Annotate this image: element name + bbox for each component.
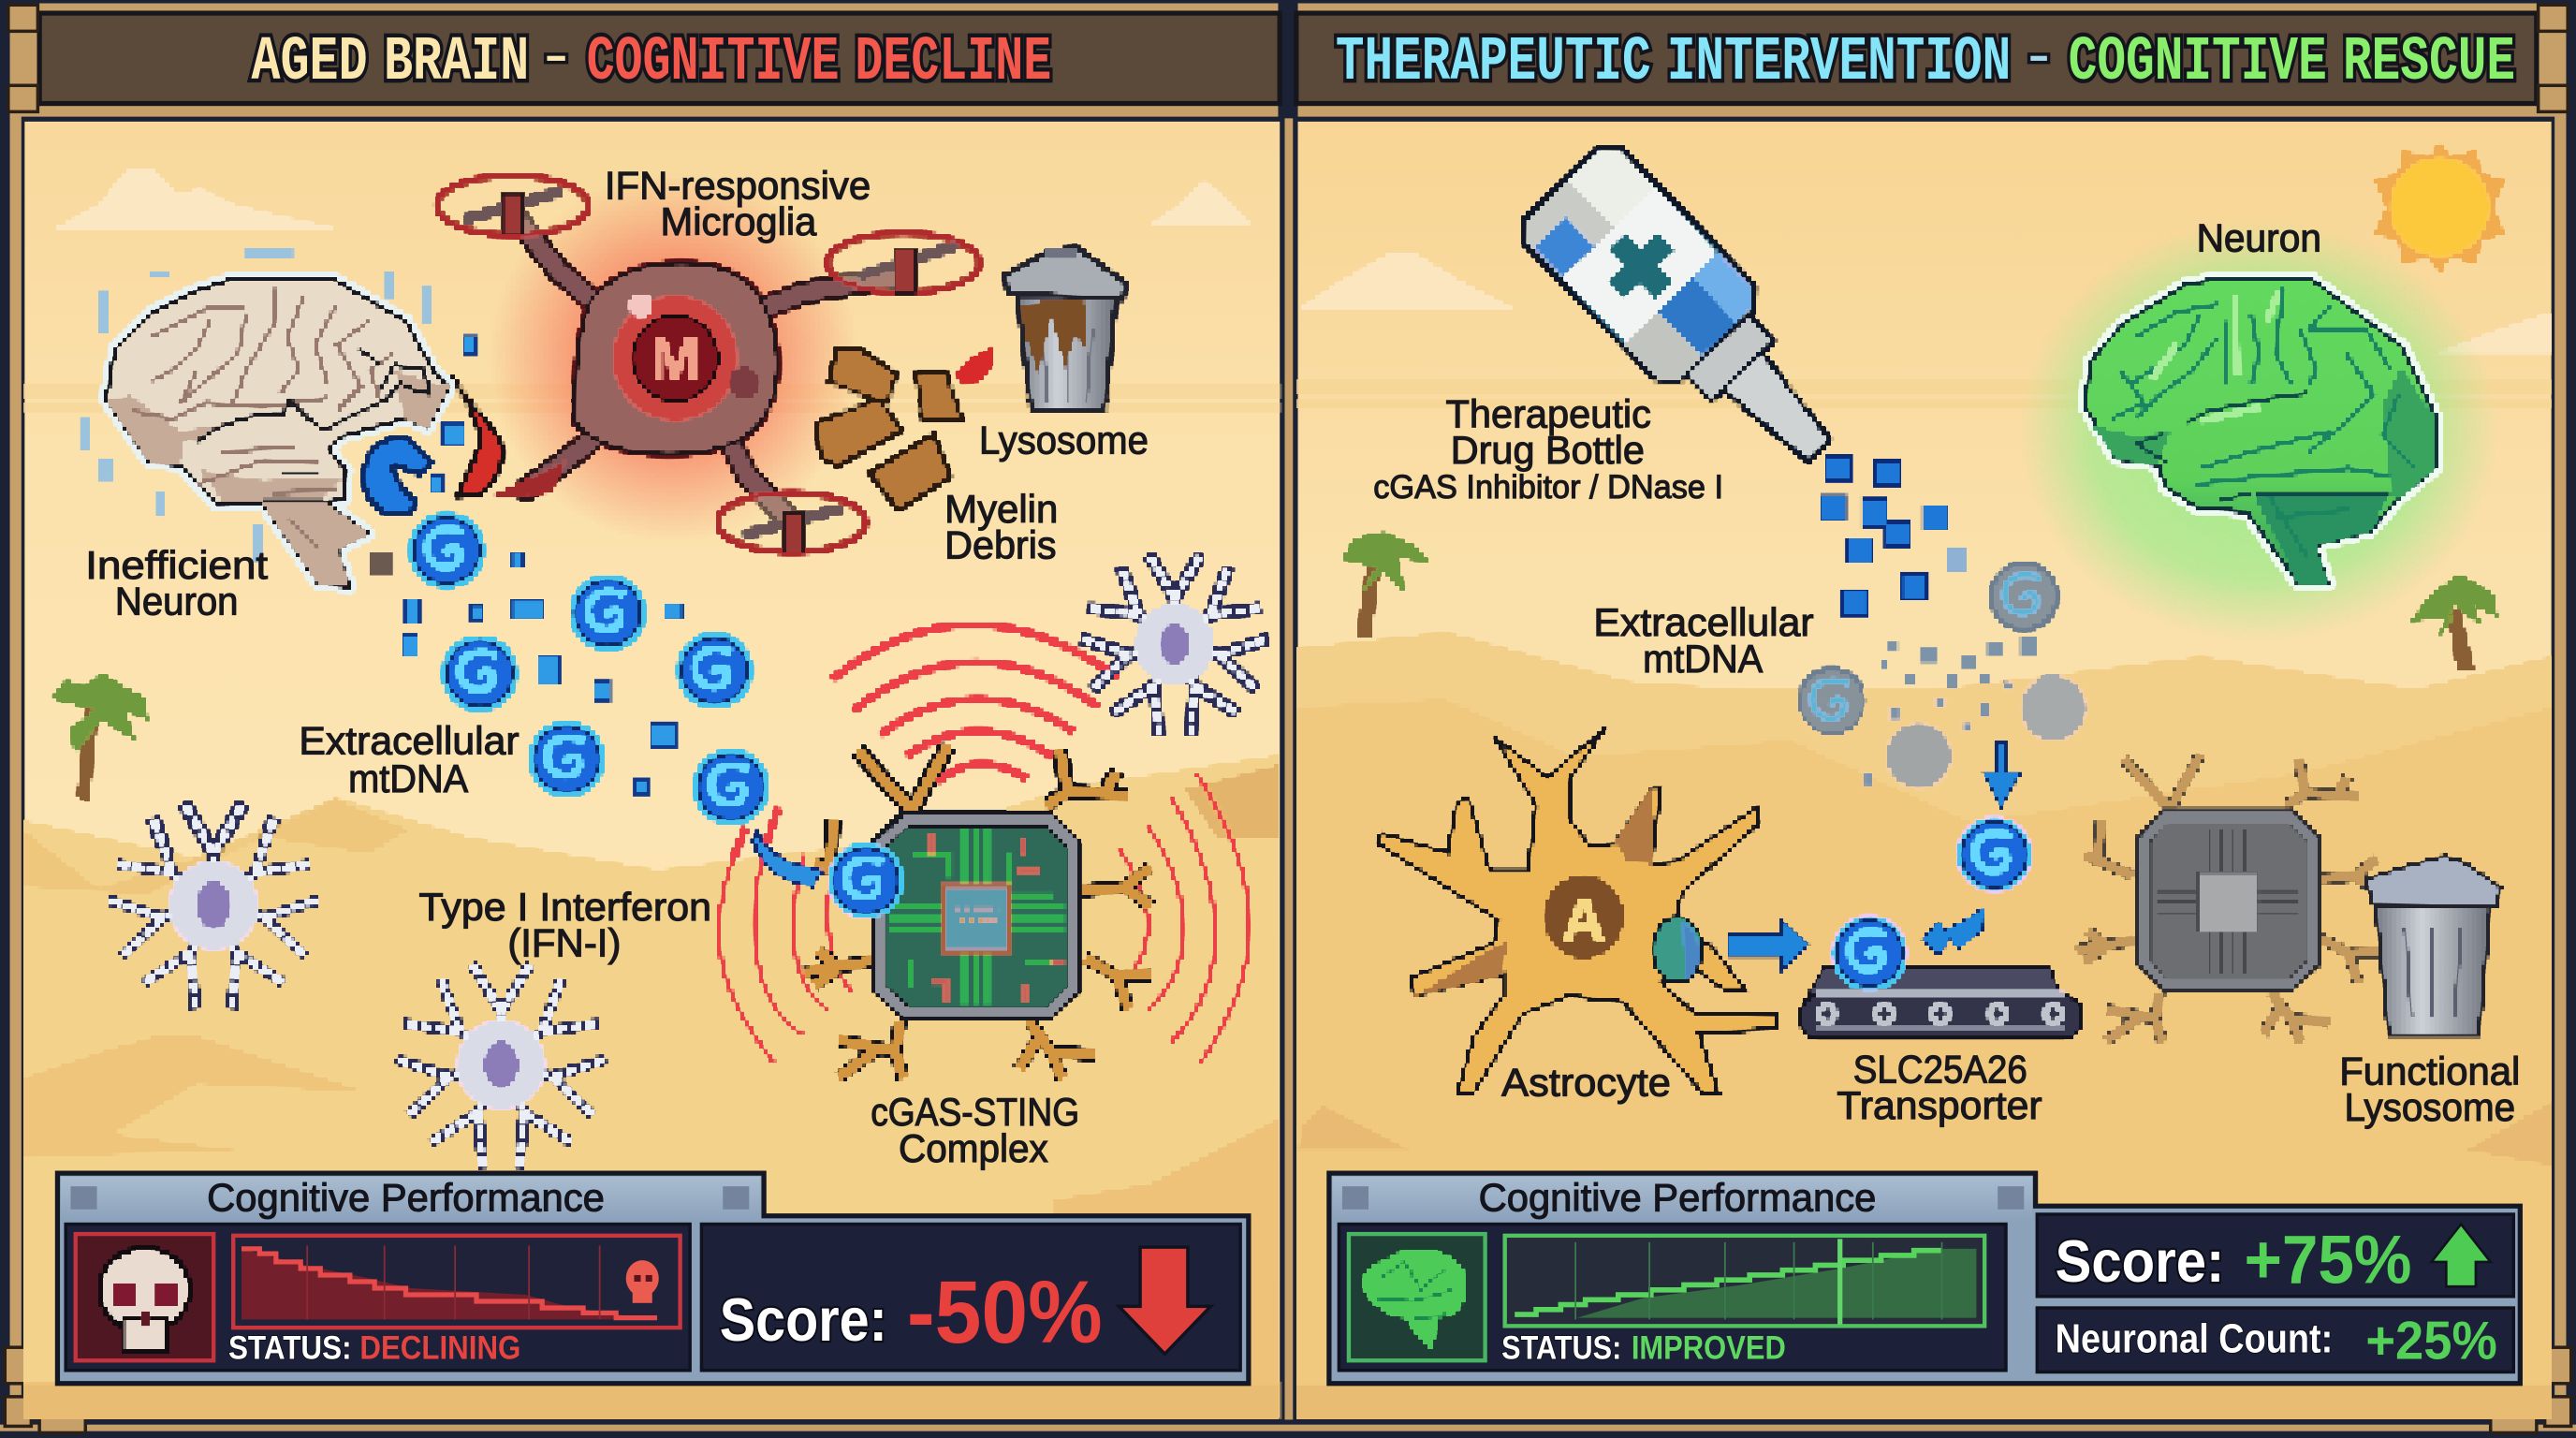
icon: transporter conveyor <box>1801 968 2082 1038</box>
tab title bar: Cognitive Performance <box>1479 1176 1876 1220</box>
bottle cross <box>1590 216 1690 315</box>
dunes right <box>1298 633 2552 1418</box>
brain folds <box>131 287 394 550</box>
score value: -50% <box>907 1263 1103 1362</box>
mtDNA spiral on conveyor <box>1832 916 1908 990</box>
icon: lysosome trash can <box>1005 248 1125 411</box>
mitochondrion <box>1653 917 1702 983</box>
tab title bar <box>1332 1176 2032 1221</box>
aura marks around brain <box>82 250 432 562</box>
title: therapeutic intervention: THERAPEUTIC INTERVENTION <box>1336 27 2011 98</box>
mtDNA fragments <box>404 337 681 794</box>
drone rotors <box>437 176 979 552</box>
title dash right <box>2029 54 2049 63</box>
icon: drug bottle <box>1514 138 1867 497</box>
labels left: Neuron <box>115 579 238 623</box>
blue arrow to transporter <box>1728 918 1808 971</box>
panel: cognitive performance left <box>57 1173 1249 1384</box>
labels left: cGAS-STING <box>871 1090 1079 1134</box>
improved chart <box>1505 1236 1984 1326</box>
fragment dust <box>1865 638 2037 785</box>
labels left <box>85 163 1149 1170</box>
down arrow <box>1119 1247 1211 1354</box>
labels left: Complex <box>899 1126 1048 1170</box>
labels right: Astrocyte <box>1501 1061 1671 1105</box>
icon: inactive chip <box>2075 754 2378 1043</box>
tab title bar <box>61 1176 761 1221</box>
red microglia glow <box>490 174 857 542</box>
labels right: Lysosome <box>2345 1085 2515 1129</box>
labels left: Type I Interferon <box>419 885 711 929</box>
labels right: Neuron <box>2197 216 2321 260</box>
drug particles <box>1822 457 1947 614</box>
icon: cGAS-STING chip <box>803 746 1151 1079</box>
icon: resting microglia left <box>108 803 319 1010</box>
dunes left <box>24 756 1280 1418</box>
title: cognitive decline: COGNITIVE DECLINE <box>587 27 1051 98</box>
decline chart <box>233 1236 681 1328</box>
myelin debris <box>816 348 961 509</box>
green glow <box>2021 220 2497 640</box>
interferon waves <box>719 624 1250 1064</box>
panel: cognitive performance right <box>1329 1173 2520 1384</box>
mtDNA spiral on chip <box>828 843 903 918</box>
green brain folds <box>2111 287 2415 559</box>
title dash left <box>546 54 567 63</box>
icon: astrocyte <box>1377 726 1776 1094</box>
labels left: Lysosome <box>979 418 1149 462</box>
palm tree left <box>52 674 148 800</box>
labels right: Transporter <box>1837 1083 2042 1127</box>
nucleus letter A: A <box>1562 888 1605 953</box>
labels left: Microglia <box>661 199 817 243</box>
small skull <box>626 1260 659 1303</box>
labels right: Functional <box>2339 1049 2520 1093</box>
scene art left <box>24 169 1280 1418</box>
score label: Score: <box>720 1285 887 1354</box>
score label: Score: <box>2056 1229 2224 1295</box>
mtDNA spirals left <box>365 439 768 825</box>
icon: sun <box>2376 143 2504 272</box>
labels left: mtDNA <box>348 756 468 800</box>
panel: aged brain scene <box>24 122 1280 1418</box>
labels left: Debris <box>944 523 1057 567</box>
icon: drone microglia <box>437 176 979 552</box>
labels right: SLC25A26 <box>1853 1048 2027 1092</box>
labels left: IFN-responsive <box>605 163 871 207</box>
labels right: Extracellular <box>1593 600 1814 644</box>
red arrow near debris <box>956 348 992 383</box>
labels right: mtDNA <box>1643 637 1763 681</box>
score value: +75% <box>2244 1221 2411 1299</box>
icon: IFN-responsive cell top right <box>1081 554 1267 736</box>
neuronal count label: Neuronal Count: <box>2056 1315 2333 1361</box>
tab title bar: Cognitive Performance <box>207 1176 605 1220</box>
neuronal count value: +25% <box>2365 1311 2497 1371</box>
icon: functional lysosome trash <box>2365 856 2500 1035</box>
labels right <box>1373 216 2520 1129</box>
letter M: M <box>651 327 700 392</box>
status value: IMPROVED <box>1632 1329 1786 1366</box>
labels right: cGAS Inhibitor / DNase I <box>1373 469 1723 506</box>
labels right: Drug Bottle <box>1451 428 1645 472</box>
icon: healthy green brain <box>2085 279 2435 583</box>
labels left: (IFN-I) <box>507 920 621 964</box>
horizon bands <box>24 383 1280 411</box>
clouds left <box>52 169 1251 230</box>
up arrow <box>2432 1225 2491 1286</box>
clouds right <box>1299 255 2552 353</box>
icon: aged brain <box>106 279 449 587</box>
skull icon box <box>76 1234 213 1360</box>
scene art right <box>1298 138 2552 1418</box>
labels right: Therapeutic <box>1445 391 1651 435</box>
title: aged brain: AGED BRAIN <box>252 27 529 98</box>
degraded mtDNA spirals <box>1797 562 2086 788</box>
curved blue arrow <box>1922 907 1984 956</box>
palm trees right <box>1342 533 2497 670</box>
mtDNA spiral right <box>1956 816 2032 892</box>
status value: DECLINING <box>359 1329 520 1366</box>
horizon bands right <box>1298 381 2552 407</box>
chip traces <box>890 829 1064 1004</box>
blue down arrow <box>1983 742 2021 809</box>
labels left: Inefficient <box>85 543 268 587</box>
green brain icon box <box>1349 1234 1486 1360</box>
icon: resting microglia centre <box>395 962 607 1169</box>
status text: STATUS: <box>1501 1329 1621 1366</box>
left header bar <box>39 13 1280 104</box>
panel: therapeutic scene <box>1298 122 2552 1418</box>
labels left: Extracellular <box>299 719 520 763</box>
status text: STATUS: <box>228 1329 352 1366</box>
blue arrow into chip <box>754 835 822 888</box>
right header bar <box>1296 13 2537 104</box>
labels left: Myelin <box>944 487 1058 531</box>
